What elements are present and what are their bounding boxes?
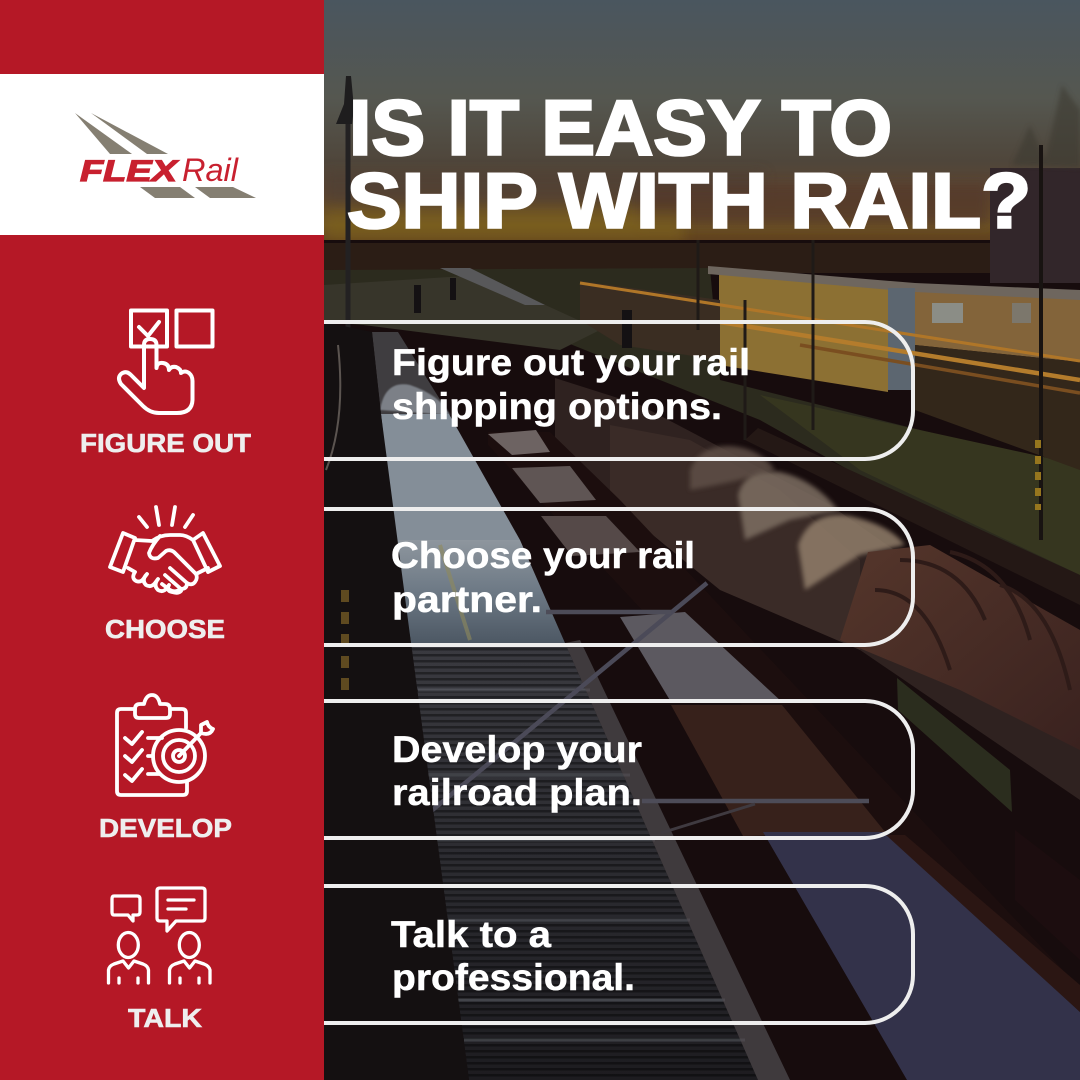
step panel: figure out your rail shipping options	[324, 322, 913, 459]
left strip	[324, 322, 469, 1080]
wagon train	[555, 378, 1080, 800]
icon: handshake	[110, 507, 220, 593]
flat cars	[488, 432, 1080, 1012]
icon: checkbox and pointing hand	[119, 310, 212, 413]
station building	[719, 272, 888, 392]
yard ground	[324, 268, 1080, 600]
label: talk: TALK	[128, 1005, 203, 1033]
logo: FlexRail: Rail	[182, 152, 239, 188]
left red sidebar	[0, 0, 324, 1080]
icon: clipboard and target	[117, 695, 213, 795]
pipes	[580, 283, 1080, 361]
sidebar item: develop	[99, 695, 232, 843]
logo: FlexRail: FLEX	[80, 155, 180, 188]
label: develop: DEVELOP	[99, 815, 232, 843]
background photo: rail yard at sunset	[324, 0, 1080, 1080]
step panel: develop your railroad plan	[324, 701, 913, 838]
step panel: choose your rail partner	[324, 509, 913, 645]
logo: FlexRail	[75, 113, 256, 198]
step panel: figure out your rail shipping options: shipping options.	[392, 386, 722, 427]
sidebar item: choose	[105, 507, 225, 644]
cross braces	[401, 583, 707, 836]
step panel: choose your rail partner: partner.	[392, 579, 542, 620]
logo panel	[0, 74, 324, 235]
step panel: figure out your rail shipping options: Figure out your rail	[392, 342, 750, 383]
title	[347, 84, 1031, 244]
step panel: develop your railroad plan: railroad plan.	[392, 772, 642, 813]
icon: two people talking	[108, 888, 210, 983]
step panel: talk to a professional: professional.	[392, 957, 635, 998]
step panel: talk to a professional	[324, 886, 913, 1023]
sidebar item: talk	[108, 888, 210, 1033]
label: figure out: FIGURE OUT	[80, 430, 251, 458]
step panel: talk to a professional: Talk to a	[391, 914, 551, 955]
title: SHIP WITH RAIL?	[347, 156, 1031, 244]
poles and signals	[346, 120, 350, 560]
label: choose: CHOOSE	[105, 616, 225, 644]
step panel: develop your railroad plan: Develop your	[392, 729, 642, 770]
silver tanker train	[372, 332, 449, 414]
title: IS IT EASY TO	[349, 84, 892, 172]
step panel: choose your rail partner: Choose your rail	[391, 535, 695, 576]
sidebar item: figure out	[80, 310, 251, 458]
